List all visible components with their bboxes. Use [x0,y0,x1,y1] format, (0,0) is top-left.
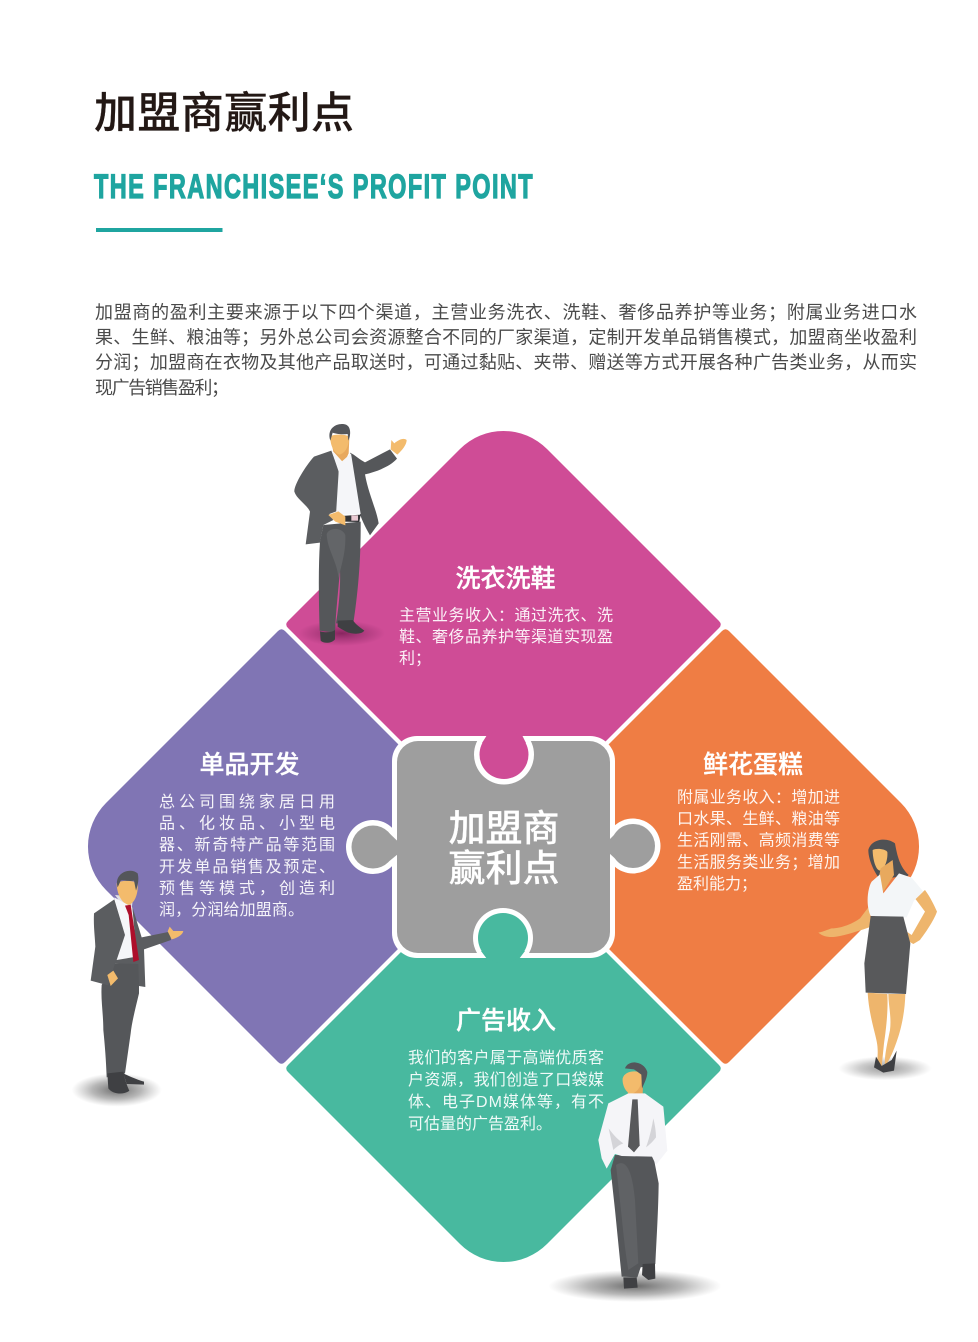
centre label: 赢利点 [448,848,560,889]
text: flowers and cakes: 盈利能力； [677,875,757,893]
text: advertising income: 广告收入 [456,1007,556,1035]
figure: businessman in white shirt, bottom [548,1062,722,1302]
text: single product development: 开发单品销售及预定、 [159,858,335,876]
intro paragraph: 现广告销售盈利； [95,378,229,398]
text: advertising income: 我们的客户属于高端优质客 [408,1049,604,1067]
panel: top petal [286,431,721,742]
intro paragraph [95,302,917,398]
text: laundry and shoe care [399,565,613,668]
centre puzzle piece [346,715,660,978]
text: flowers and cakes: 口水果、生鲜、粮油等 [677,810,840,828]
panel: right petal [608,629,919,1064]
text: single product development: 总公司围绕家居日用 [159,793,335,811]
text: advertising income [408,1007,604,1133]
text: flowers and cakes: 鲜花蛋糕 [703,751,803,779]
text: flowers and cakes [677,751,840,893]
panel: left petal [88,629,398,1064]
text: laundry and shoe care: 鞋、奢侈品养护等渠道实现盈 [399,628,613,646]
text: single product development: 预售等模式，创造利 [159,880,335,898]
text: flowers and cakes: 生活服务类业务；增加 [677,854,840,872]
text: flowers and cakes: 生活刚需、高频消费等 [677,832,840,850]
subtitle: THE FRANCHISEE‘S PROFIT POINT [94,168,533,206]
text: advertising income: 体、电子DM媒体等，有不 [408,1093,604,1111]
text: single product development: 单品开发 [199,751,300,779]
title: 加盟商赢利点 [94,90,354,138]
text: single product development: 润，分润给加盟商。 [159,901,304,919]
diagram: four petals with centre puzzle piece [88,431,919,1262]
intro paragraph: 分润；加盟商在衣物及其他产品取送时，可通过黏贴、夹带、赠送等方式开展各种广告类业务，从而实 [95,352,917,372]
figure: businessman with red tie, left [72,871,183,1107]
centre label: 加盟商 [448,808,560,849]
text: single product development: 器、新奇特产品等范围 [159,836,335,854]
panel: bottom petal [286,952,721,1262]
figure: businessman pointing, top [294,424,407,646]
text: single product development [159,751,335,919]
text: advertising income: 可估量的广告盈利。 [408,1115,552,1133]
text: flowers and cakes: 附属业务收入：增加进 [677,788,840,806]
text: laundry and shoe care: 主营业务收入：通过洗衣、洗 [399,606,613,624]
intro paragraph: 果、生鲜、粮油等；另外总公司会资源整合不同的厂家渠道，定制开发单品销售模式，加盟商坐收盈利 [95,328,917,348]
text: advertising income: 户资源，我们创造了口袋媒 [408,1071,604,1089]
intro paragraph: 加盟商的盈利主要来源于以下四个渠道，主营业务洗衣、洗鞋、奢侈品养护等业务；附属业务进口水 [95,302,917,322]
text: laundry and shoe care: 利； [399,650,431,668]
centre label [448,808,560,889]
text: single product development: 品、化妆品、小型电 [159,814,335,832]
text: laundry and shoe care: 洗衣洗鞋 [455,565,556,593]
figure: businesswoman, right [818,840,937,1080]
heading underline [96,228,222,232]
